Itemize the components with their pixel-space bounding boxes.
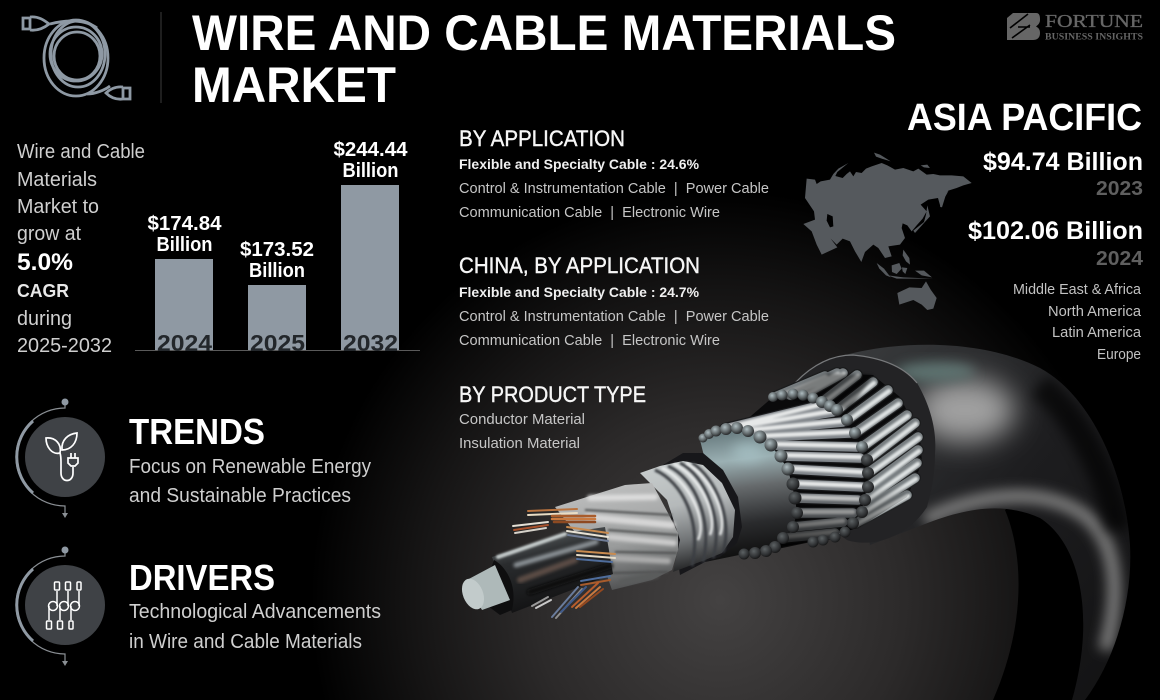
copper wire bundles <box>513 509 615 618</box>
core tip face <box>458 575 488 613</box>
bar 2025 <box>248 285 306 350</box>
value labels: $244.44 <box>334 139 408 161</box>
segment: China by application: Flexible and Specialty Cable : 24.7% <box>459 284 700 300</box>
value labels: Billion <box>156 234 212 256</box>
outer armour bed <box>775 373 922 542</box>
bar 2032 <box>341 185 399 350</box>
strand bundle <box>555 483 678 590</box>
other regions list: Latin America <box>1052 324 1142 341</box>
value labels: Billion <box>249 260 305 282</box>
year labels: 2024 <box>157 330 212 356</box>
second wire ring <box>768 388 874 548</box>
icon: plugged cables <box>46 582 81 629</box>
core tip <box>465 565 510 610</box>
region: Asia Pacific values: 2023 <box>1096 178 1143 200</box>
value labels: Billion <box>342 160 398 182</box>
segment: China by application: Communication Cable | Electronic Wire <box>459 332 720 349</box>
logo: Fortune Business Insights <box>1007 11 1143 42</box>
other regions list: North America <box>1048 303 1142 320</box>
drivers text: Technological Advancements <box>129 601 381 623</box>
icon: coiled cable <box>23 17 130 99</box>
trends text: Focus on Renewable Energy <box>129 456 371 478</box>
year labels <box>158 335 397 351</box>
CAGR text block: grow at <box>17 223 81 245</box>
strand gaps <box>585 510 678 573</box>
other regions list: Europe <box>1097 346 1141 363</box>
segment: China by application: Control & Instrumentation Cable | Power Cable <box>459 308 769 325</box>
segment: by product type: Conductor Material <box>459 411 585 428</box>
first wire ring <box>698 422 803 560</box>
region: Asia Pacific values <box>907 97 1144 270</box>
insulated core strands <box>555 483 678 590</box>
inner armour wires <box>725 404 862 538</box>
badge disc <box>25 565 105 645</box>
year labels: 2025 <box>250 330 305 356</box>
region: Asia Pacific values: $94.74 Billion <box>983 148 1143 176</box>
trends text: TRENDS <box>129 411 265 452</box>
logo: Fortune Business Insights: FORTUNE <box>1045 11 1143 31</box>
other regions list <box>1013 281 1142 363</box>
segment: by application: Control & Instrumentation Cable | Power Cable <box>459 180 769 197</box>
trends text: and Sustainable Practices <box>129 485 351 507</box>
bar chart <box>135 139 420 356</box>
dark separator band <box>663 453 742 575</box>
shadow behind cable tail <box>993 400 1160 700</box>
icon: plant and plug <box>46 433 78 480</box>
segment: by application <box>459 126 769 221</box>
value labels: $173.52 <box>240 239 314 261</box>
drivers text: DRIVERS <box>129 557 275 598</box>
segment: by product type <box>459 382 646 452</box>
title <box>192 5 896 113</box>
badge disc <box>25 417 105 497</box>
end ring <box>790 355 935 543</box>
strand highlights <box>588 497 674 582</box>
central black jacket <box>492 527 613 613</box>
cable photograph illustration <box>458 345 1160 700</box>
drivers text: in Wire and Cable Materials <box>129 631 362 653</box>
inner armour bed <box>703 397 868 554</box>
trends text <box>129 411 371 507</box>
CAGR text block: 2025-2032 <box>17 335 112 357</box>
drivers text <box>129 557 381 653</box>
inner armour low shading <box>744 484 866 556</box>
CAGR text block <box>17 141 145 357</box>
badge connector <box>16 546 68 666</box>
CAGR text block: 5.0% <box>17 249 73 276</box>
outer armour wires <box>775 373 919 524</box>
CAGR text block: Wire and Cable <box>17 141 145 163</box>
segment: by product type: Insulation Material <box>459 435 580 452</box>
year labels: 2032 <box>343 330 398 356</box>
segment: by application: Flexible and Specialty Cable : 24.6% <box>459 156 700 172</box>
logo: Fortune Business Insights: BUSINESS INSIGHTS <box>1045 32 1143 42</box>
silver spiral band <box>640 461 735 572</box>
core collar <box>480 560 514 615</box>
inner blue grey jacket <box>700 429 797 562</box>
region: Asia Pacific values: ASIA PACIFIC <box>907 97 1142 139</box>
segment: China by application: CHINA, BY APPLICATION <box>459 253 700 278</box>
map: Asia Pacific <box>803 153 972 310</box>
segment: by product type: BY PRODUCT TYPE <box>459 382 646 407</box>
header divider <box>160 12 162 103</box>
title: MARKET <box>192 57 396 113</box>
background glow <box>300 180 1160 700</box>
CAGR text block: CAGR <box>17 281 69 301</box>
title: WIRE AND CABLE MATERIALS <box>192 5 896 61</box>
segment: China by application <box>459 253 769 349</box>
badge connector <box>16 398 68 518</box>
jacket blue highlight <box>732 443 764 461</box>
CAGR text block: Market to <box>17 196 99 218</box>
region: Asia Pacific values: 2024 <box>1096 248 1144 270</box>
value labels: $174.84 <box>148 213 222 235</box>
chart baseline <box>135 350 420 351</box>
outer armour low shading <box>835 440 925 535</box>
jacket reflections <box>498 534 610 592</box>
CAGR text block: Materials <box>17 169 97 191</box>
bar 2024 <box>155 259 213 350</box>
outer armour upper shading <box>775 373 873 410</box>
spiral ribs <box>655 463 726 566</box>
CAGR text block: during <box>17 308 72 330</box>
icon badge: drivers <box>16 546 105 666</box>
region: Asia Pacific values: $102.06 Billion <box>968 217 1143 245</box>
segment: by application: Communication Cable | Electronic Wire <box>459 204 720 221</box>
segment: by application: BY APPLICATION <box>459 126 625 151</box>
value labels <box>148 139 408 282</box>
icon badge: trends <box>16 398 105 518</box>
end ring highlight <box>795 355 917 383</box>
outer cable jacket <box>835 345 1130 700</box>
other regions list: Middle East & Africa <box>1013 281 1142 298</box>
